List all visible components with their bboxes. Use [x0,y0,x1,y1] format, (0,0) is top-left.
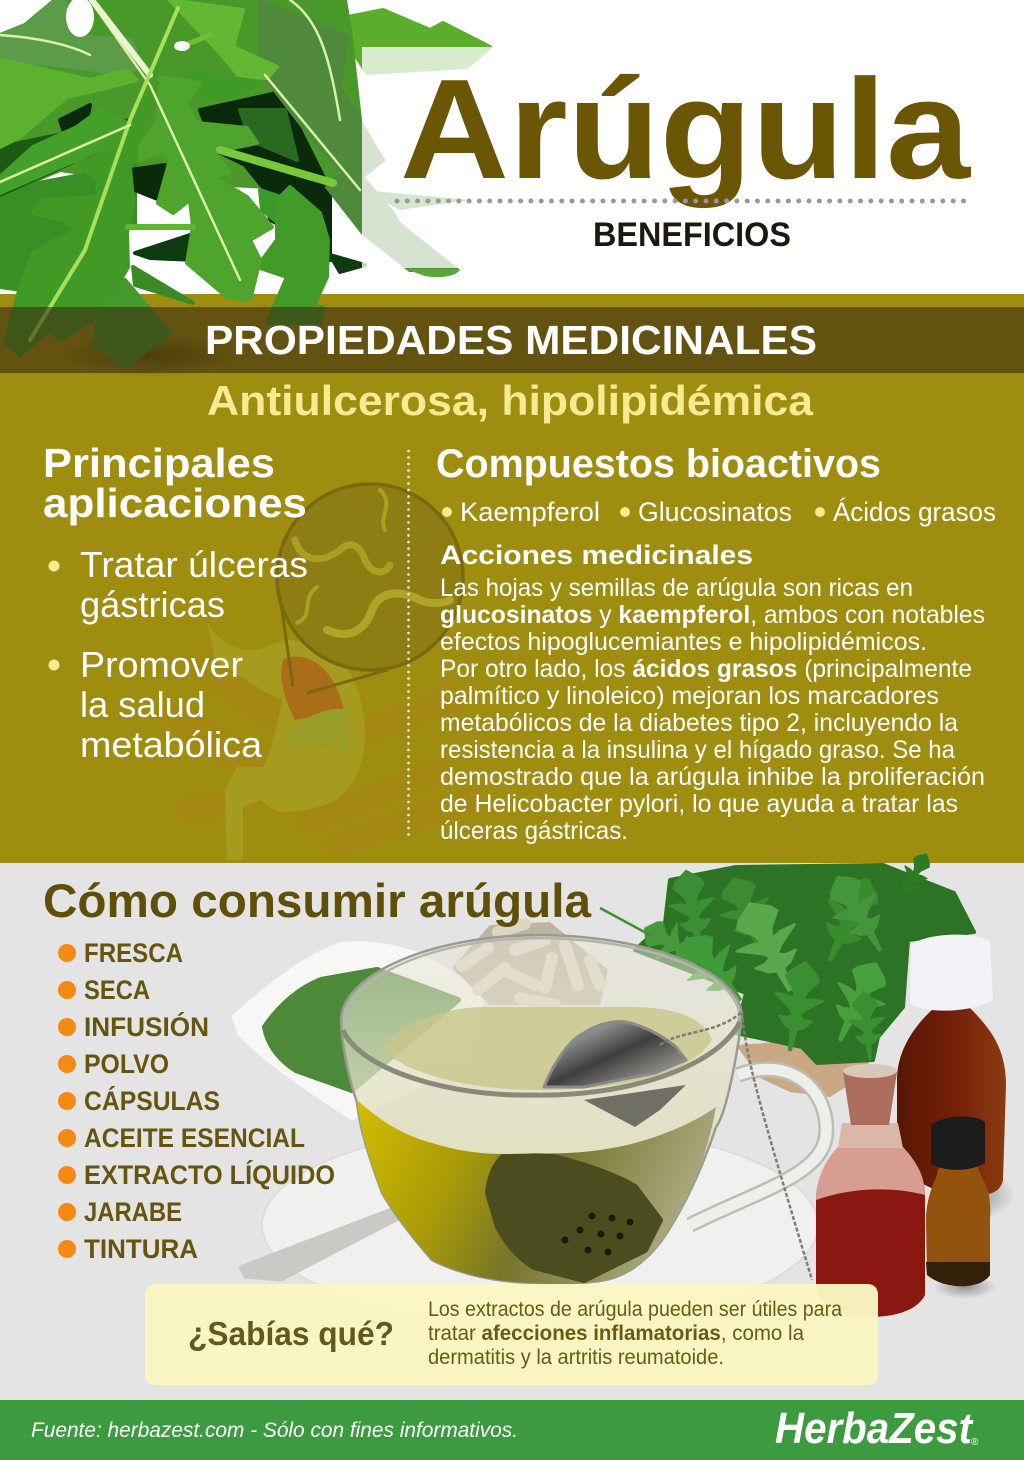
medicinal actions paragraph: Las hojas y semillas de arúgula son ricas en [440,574,913,602]
consumption forms list: EXTRACTO LÍQUIDO [84,1159,335,1190]
subheading: properties: Antiulcerosa, hipolipidémica [207,377,814,424]
heading: main applications: aplicaciones [43,480,307,526]
callout text: dermatitis y la artritis reumatoide. [428,1346,724,1369]
registered mark: ® [971,1437,979,1448]
callout text: Los extractos de arúgula pueden ser útiles para [428,1298,842,1321]
photo: capsules [452,922,608,1005]
medicinal actions paragraph: Por otro lado, los ácidos grasos (principalmente [440,655,972,683]
cup body [341,935,742,1284]
photo: powder dish [235,944,483,1117]
handle [690,1069,826,1225]
consumption forms list [58,938,335,1264]
application list: la salud [80,684,205,725]
medicinal actions paragraph: efectos hipoglucemiantes e hipolipidémicos. [440,628,927,656]
photo: arugula leaves header [0,0,1024,377]
compounds list: Glucosinatos [638,497,792,527]
dark gaps [200,90,330,265]
application list [48,544,308,765]
consumption forms list: SECA [84,975,150,1005]
application list: gástricas [80,584,225,625]
callout text: tratar afecciones inflamatorias, como la [428,1322,804,1345]
band: medicinal properties [0,307,1024,373]
callout text [428,1298,842,1369]
spiky small leaf [133,267,193,303]
title: Arúgula [400,50,971,209]
lower left in band [93,280,170,367]
heading: main applications: Principales [43,440,275,486]
top center bright leaf [170,0,277,78]
medicinal actions paragraph: de Helicobacter pylori, lo que ayuda a tratar las [440,790,958,818]
photo: tea cup [341,935,826,1284]
medicinal actions paragraph: resistencia a la insulina y el hígado graso. Se ha [440,736,955,764]
application list: Tratar úlceras [80,544,308,585]
photo: saucer and spoon [240,1125,818,1325]
medicinal actions paragraph [440,574,985,845]
medicinal actions paragraph: demostrado que la arúgula inhibe la proliferación [440,763,985,791]
consumption forms list: TINTURA [84,1234,198,1264]
footer [0,1400,1024,1460]
rim [343,1022,740,1095]
photo: large bottle [897,935,1015,1220]
medicinal actions paragraph: úlceras gástricas. [440,817,628,845]
heading: how to consume: Cómo consumir arúgula [43,874,592,927]
medicinal actions paragraph: palmítico y linoleico) mejoran los marcadores [440,682,939,710]
compounds list: Ácidos grasos [833,497,996,527]
back mass [0,0,360,195]
medicinal actions paragraph: glucosinatos y kaempferol, ambos con notables [440,601,985,629]
inner tea surface [382,1007,712,1090]
dotted rule under title [397,198,972,204]
consumption forms list: POLVO [84,1049,169,1079]
upper left leaves [0,0,140,75]
photo: cork bottle [816,1064,925,1317]
logo: HerbaZest: HerbaZest [775,1404,974,1453]
panel: how to consume background [0,863,1024,1400]
dark mid leaf [240,110,297,160]
far right bright leaf [333,10,490,73]
consumption forms list: ACEITE ESENCIAL [84,1123,305,1153]
compounds list: Kaempferol [460,497,600,527]
callout heading: ¿Sabías qué? [188,1315,394,1352]
photo: salad bowl [600,848,974,1097]
lower right leaf [260,190,290,227]
right tall leaf [260,0,457,270]
tea liquid [357,1100,716,1284]
chain [660,1012,812,1280]
consumption forms list: CÁPSULAS [84,1085,220,1116]
big left leaf [5,83,157,355]
medicinal actions paragraph: metabólicos de la diabetes tipo 2, incluyendo la [440,709,958,737]
midribs and stems [0,0,360,340]
source note: Fuente: herbazest.com - Sólo con fines informativos. [31,1419,518,1442]
application list: Promover [80,644,243,685]
panel: bioactive compounds [436,442,996,845]
heading: medicinal actions: Acciones medicinales [440,540,753,570]
stray leaf tip below overlay [405,269,460,277]
application list: metabólica [80,724,263,765]
heading: bioactive compounds: Compuestos bioactivos [436,442,881,486]
subtitle: BENEFICIOS [593,216,791,254]
gaps showing white background [66,0,94,37]
panel: main applications [43,440,308,765]
consumption forms list: INFUSIÓN [84,1011,209,1042]
infuser [544,1022,686,1087]
heading: medicinal properties: PROPIEDADES MEDICINALES [205,317,817,363]
consumption forms list: JARABE [84,1197,182,1227]
translucent overlay panel behind title [362,47,1024,268]
compounds list [442,497,996,527]
dotted divider [407,451,410,838]
photo: small amber bottle [926,1116,997,1299]
center leaf [140,77,272,300]
panel: medicinal properties background [0,294,1024,863]
consumption forms list: FRESCA [84,938,183,968]
callout: did you know [145,1284,878,1385]
faded hands and stomach illustration [180,484,470,860]
